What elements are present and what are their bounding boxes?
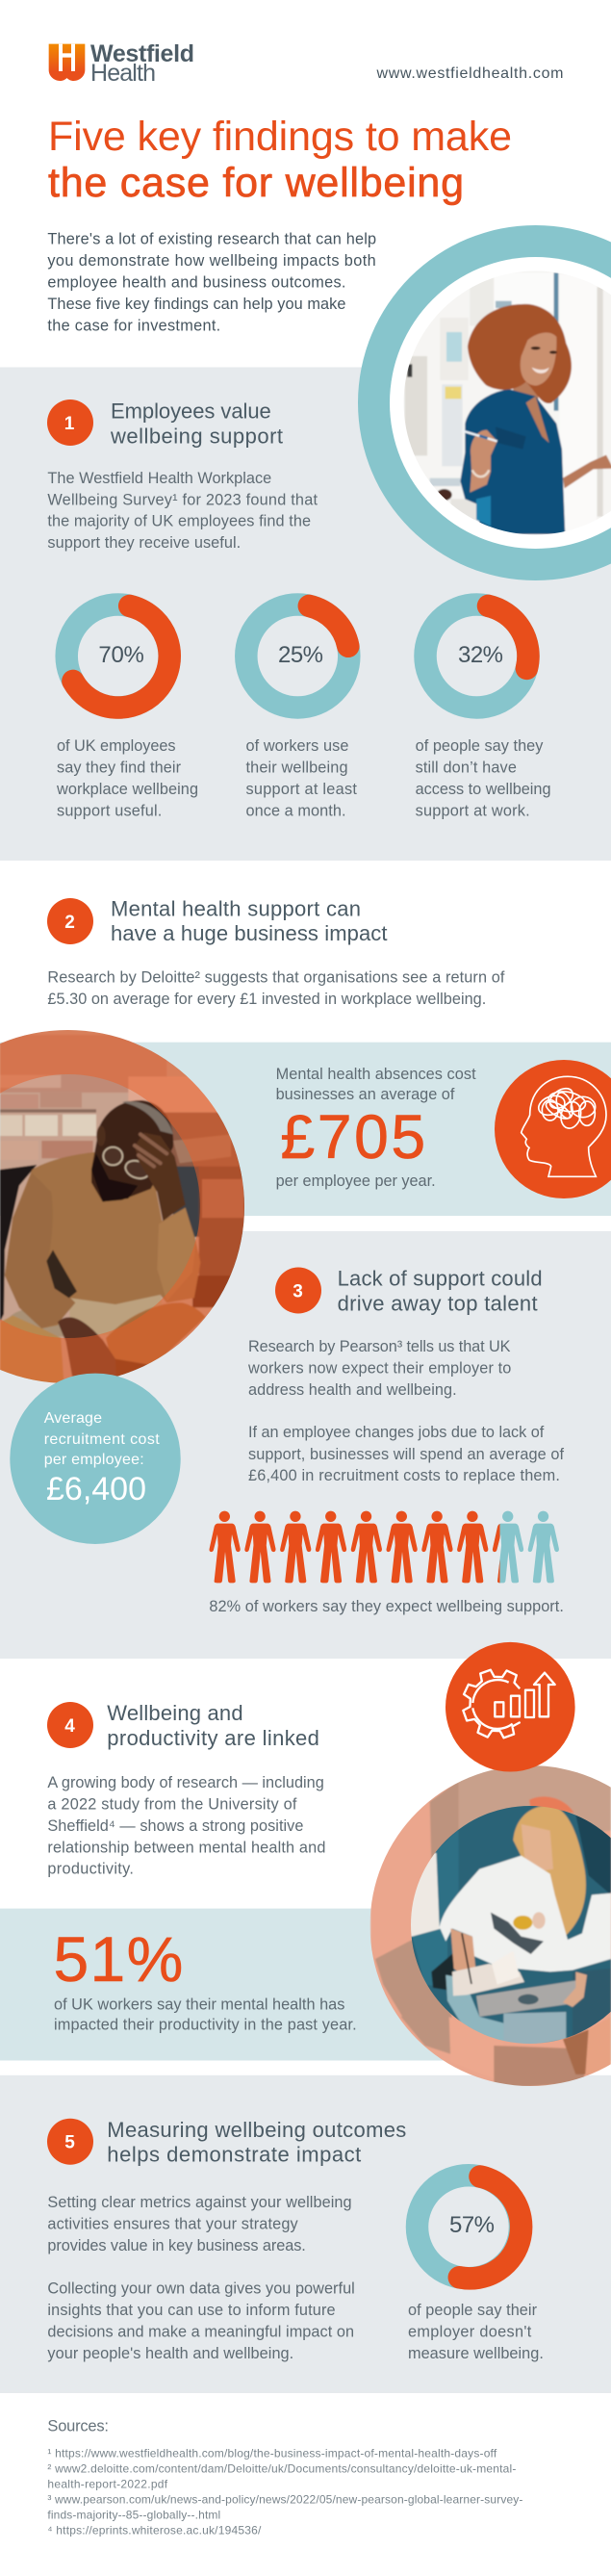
number badge 1: 1 — [64, 414, 75, 434]
heading text: have a huge business impact — [111, 921, 387, 945]
donut chart: 70%: 70% — [98, 642, 144, 668]
intro text: employee health and business outcomes. — [47, 274, 345, 292]
intro text: There's a lot of existing research that can help — [47, 231, 376, 248]
number badge 2: 2 — [64, 913, 75, 933]
photo: woman working in armchair — [370, 1764, 611, 2089]
stat: mental health absence cost: per employee per year. — [276, 1172, 436, 1190]
heading text: drive away top talent — [338, 1292, 538, 1316]
finding 3 body text: £6,400 in recruitment costs to replace them. — [248, 1467, 560, 1484]
stat: mental health absence cost: £705 — [281, 1102, 425, 1172]
caption: 70%: of UK employees — [57, 737, 175, 755]
callout: average recruitment cost — [10, 1374, 181, 1544]
number badge 5 — [47, 2119, 93, 2165]
number badge 4 — [47, 1702, 93, 1748]
panel: finding 2 stat band — [0, 1043, 611, 1216]
callout: average recruitment cost: recruitment cost — [44, 1431, 160, 1448]
donut chart: 32% — [425, 605, 528, 708]
logo wordmark: Westfield: Westfield — [90, 40, 194, 67]
title: the case for wellbeing — [48, 160, 464, 206]
title: Five key findings to make — [48, 114, 512, 160]
finding 4 body text: relationship between mental health and — [47, 1839, 325, 1856]
caption: 57%: employer doesn't — [408, 2324, 532, 2341]
title — [48, 114, 512, 206]
sources heading: Sources: — [47, 2418, 109, 2435]
finding 5 heading — [47, 2118, 406, 2167]
caption: 70%: say they find their — [57, 759, 182, 776]
caption: 25%: support at least — [246, 781, 357, 798]
stat: 51% productivity: 51% — [54, 1923, 183, 1995]
icon: Westfield Health mark — [49, 44, 85, 81]
heading text — [110, 399, 283, 449]
finding 3 body text: address health and wellbeing. — [248, 1381, 457, 1399]
finding 5 body text: insights that you can use to inform future — [47, 2302, 336, 2319]
donut chart: 32%: 32% — [458, 642, 503, 668]
intro text: These five key findings can help you make — [47, 296, 345, 313]
donut chart: 70% — [66, 605, 169, 708]
finding 5 body text: decisions and make a meaningful impact on — [47, 2324, 354, 2341]
caption: 57%: of people say their — [408, 2302, 538, 2319]
caption: 32%: still don’t have — [416, 759, 517, 776]
finding 4 body text: productivity. — [47, 1860, 134, 1877]
heading text: Measuring wellbeing outcomes — [107, 2118, 406, 2142]
caption: 32%: of people say they — [416, 737, 544, 755]
finding 5 body text: provides value in key business areas. — [47, 2237, 306, 2254]
icon: head with tangled thoughts — [495, 1060, 611, 1198]
callout: average recruitment cost: per employee: — [44, 1452, 144, 1468]
caption: 32%: support at work. — [416, 802, 530, 819]
sources list: ² www2.deloitte.com/content/dam/Deloitte/uk/Documents/consultancy/deloitte-uk-mental- — [47, 2462, 516, 2476]
finding 1 body text: support they receive useful. — [47, 534, 241, 552]
caption: 32% — [416, 737, 550, 819]
donut chart: 57% — [418, 2176, 522, 2279]
caption: 32%: access to wellbeing — [416, 781, 550, 798]
finding 2 body text — [47, 969, 505, 1008]
intro text: the case for investment. — [47, 317, 220, 334]
number badge 3: 3 — [293, 1282, 303, 1301]
panel: finding 1 background — [0, 368, 611, 861]
donut chart: 25%: 25% — [278, 642, 323, 668]
stat: 51% productivity: impacted their productivity in the past year. — [54, 2017, 357, 2034]
number badge 1 — [47, 399, 93, 446]
heading text — [107, 1701, 319, 1750]
heading text: Wellbeing and — [107, 1701, 243, 1725]
finding 2 body text: £5.30 on average for every £1 invested in workplace wellbeing. — [47, 991, 486, 1008]
heading text — [107, 2118, 406, 2167]
donut chart: 25% — [246, 605, 349, 708]
heading text: productivity are linked — [107, 1726, 319, 1750]
finding 4 body text: Sheffield⁴ — shows a strong positive — [47, 1817, 303, 1835]
finding 5 body text — [47, 2194, 355, 2362]
intro text: you demonstrate how wellbeing impacts both — [47, 252, 376, 270]
caption: 70%: support useful. — [57, 802, 162, 819]
photo: man with head in hand — [0, 1025, 250, 1386]
finding 1 heading — [47, 399, 283, 449]
finding 2 heading — [47, 897, 387, 945]
sources list: health-report-2022.pdf — [47, 2478, 168, 2491]
number badge 5: 5 — [64, 2133, 75, 2153]
finding 4 body text: a 2022 study from the University of — [47, 1796, 297, 1814]
stat: 51% productivity: of UK workers say their mental health has — [54, 1996, 344, 2014]
heading text: wellbeing support — [110, 425, 283, 449]
logo wordmark: Health: Health — [90, 60, 156, 87]
caption: 25%: their wellbeing — [246, 759, 348, 776]
heading text: helps demonstrate impact — [107, 2143, 361, 2167]
finding 1 body text: The Westfield Health Workplace — [47, 470, 271, 487]
finding 3 heading — [275, 1267, 543, 1316]
sources list: ³ www.pearson.com/uk/news-and-policy/news/2022/05/new-pearson-global-learner-survey- — [47, 2493, 522, 2507]
finding 3 body text: Research by Pearson³ tells us that UK — [248, 1338, 511, 1355]
stat: 51% productivity — [54, 1923, 357, 2034]
pictogram caption: 82% of workers say they expect wellbeing support. — [209, 1598, 564, 1615]
heading text: Mental health support can — [111, 897, 361, 921]
heading text: Lack of support could — [338, 1267, 543, 1291]
sources list: finds-majority--85--globally--.html — [47, 2509, 220, 2522]
heading text — [338, 1267, 543, 1316]
finding 3 body text — [247, 1338, 564, 1484]
logo: Westfield Health — [49, 40, 194, 87]
panel: finding 5 background — [0, 2075, 611, 2393]
caption: 57%: measure wellbeing. — [408, 2345, 544, 2362]
finding 2 body text: Research by Deloitte² suggests that organisations see a return of — [47, 969, 505, 987]
caption: 70%: workplace wellbeing — [56, 781, 198, 798]
intro text — [47, 231, 376, 334]
callout: average recruitment cost: Average — [44, 1410, 102, 1427]
finding 1 body text — [47, 470, 318, 552]
panel: finding 4 stat band — [0, 1909, 611, 2060]
panel: finding 3 background — [0, 1231, 611, 1659]
number badge 4: 4 — [64, 1716, 75, 1737]
finding 1 body text: the majority of UK employees find the — [47, 513, 311, 530]
finding 5 body text: Setting clear metrics against your wellbeing — [47, 2194, 352, 2211]
finding 3 body text: support, businesses will spend an average of — [248, 1446, 564, 1463]
heading text — [111, 897, 387, 945]
number badge 3 — [275, 1267, 321, 1313]
sources list: ⁴ https://eprints.whiterose.ac.uk/194536/ — [47, 2524, 262, 2537]
sources list — [47, 2447, 522, 2537]
caption: 25% — [246, 737, 357, 819]
website address: www.westfieldhealth.com — [375, 65, 564, 82]
caption: 25%: once a month. — [246, 802, 346, 819]
stat: mental health absence cost: businesses an average of — [276, 1086, 455, 1103]
stat: mental health absence cost: Mental health absences cost — [276, 1066, 476, 1083]
icon: gear with rising bars — [446, 1642, 575, 1771]
number badge 2 — [47, 898, 93, 944]
caption: 70% — [56, 737, 198, 819]
finding 4 body text: A growing body of research — including — [47, 1774, 324, 1791]
heading text: Employees value — [111, 399, 271, 424]
photo: woman presenting in teal ring — [358, 225, 611, 580]
finding 5 body text: Collecting your own data gives you powerful — [47, 2280, 355, 2298]
finding 5 body text: activities ensures that your strategy — [47, 2216, 299, 2233]
finding 3 body text: workers now expect their employer to — [247, 1360, 511, 1378]
caption: 25%: of workers use — [246, 737, 348, 755]
callout: average recruitment cost: £6,400 — [46, 1471, 146, 1507]
pictogram: 82% of workers — [210, 1511, 559, 1583]
finding 3 body text: If an employee changes jobs due to lack of — [248, 1424, 545, 1441]
finding 4 body text — [47, 1774, 325, 1877]
sources list: ¹ https://www.westfieldhealth.com/blog/the-business-impact-of-mental-health-days-off — [47, 2447, 497, 2460]
donut chart: 57%: 57% — [449, 2212, 495, 2238]
caption: 57% — [408, 2302, 544, 2362]
finding 4 heading — [47, 1701, 319, 1750]
finding 1 body text: Wellbeing Survey¹ for 2023 found that — [47, 491, 318, 508]
finding 5 body text: your people's health and wellbeing. — [47, 2345, 293, 2362]
stat: mental health absence cost — [276, 1066, 476, 1190]
